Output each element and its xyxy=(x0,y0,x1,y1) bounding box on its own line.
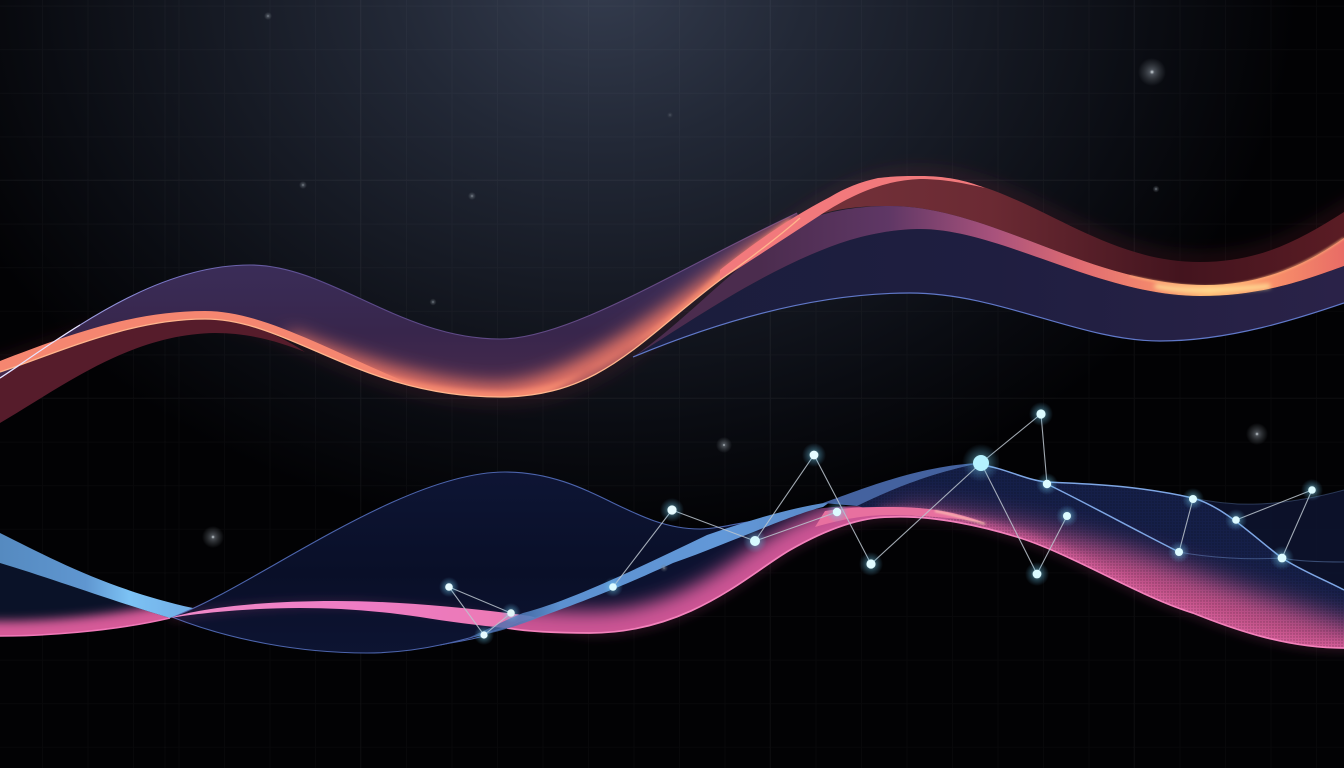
red upper ribbon xyxy=(800,176,1344,285)
blue left ribbon xyxy=(0,533,193,618)
blue rising ribbon xyxy=(470,502,830,637)
pink ribbon glow xyxy=(170,517,1344,648)
upper wave group xyxy=(0,176,1344,430)
purple-to-gold middle ribbon xyxy=(633,206,1344,357)
pink body with fade xyxy=(508,506,932,632)
blue right edge lines xyxy=(981,465,1344,590)
coral rising tip xyxy=(720,176,985,280)
pink ribbon xyxy=(170,601,590,633)
coral left ribbon xyxy=(0,311,399,380)
pink left edge xyxy=(0,618,170,636)
network graph: connecting lines xyxy=(449,414,1312,635)
navy central lobe xyxy=(172,472,790,653)
blue lower edge line xyxy=(633,293,1344,357)
lobe edge line xyxy=(0,213,797,378)
blue crest band xyxy=(823,463,981,506)
bright highlight lines xyxy=(0,218,1344,397)
faint blue connector xyxy=(440,636,484,645)
red lower-left ribbon xyxy=(0,319,305,423)
purple left lobe xyxy=(0,213,800,397)
lobe outline xyxy=(172,472,790,653)
coral soft gradient xyxy=(280,213,798,396)
pink crest band xyxy=(815,507,985,527)
navy right ribbon xyxy=(633,229,1344,357)
particles: glowing dust xyxy=(1,12,1268,575)
pink edge xyxy=(507,517,1344,648)
right mesh fill xyxy=(858,464,1344,648)
right dim ribbon xyxy=(1193,490,1344,590)
coral ambient glow xyxy=(0,176,1344,397)
network graph: nodes xyxy=(439,402,1323,645)
lower wave group xyxy=(0,463,1344,656)
navy left ribbon with pink fade xyxy=(0,563,168,636)
